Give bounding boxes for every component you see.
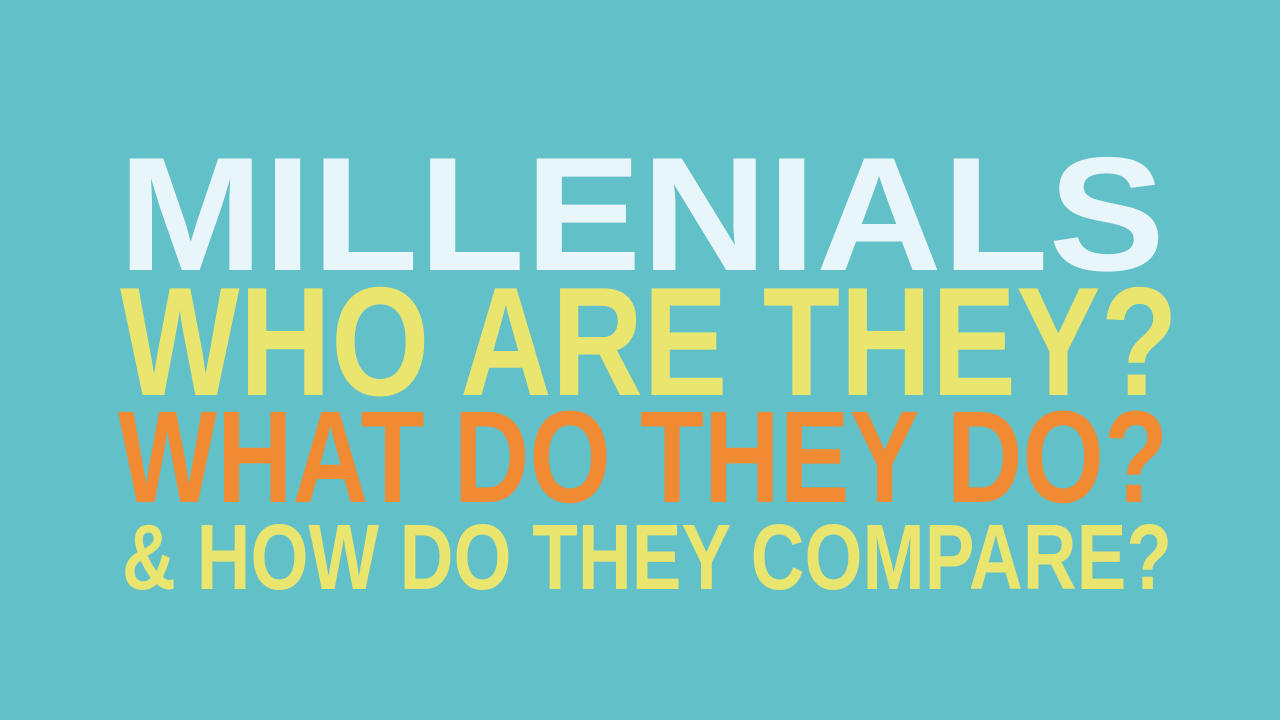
heading: MILLENIALS: MILLENIALS: [118, 124, 1165, 305]
